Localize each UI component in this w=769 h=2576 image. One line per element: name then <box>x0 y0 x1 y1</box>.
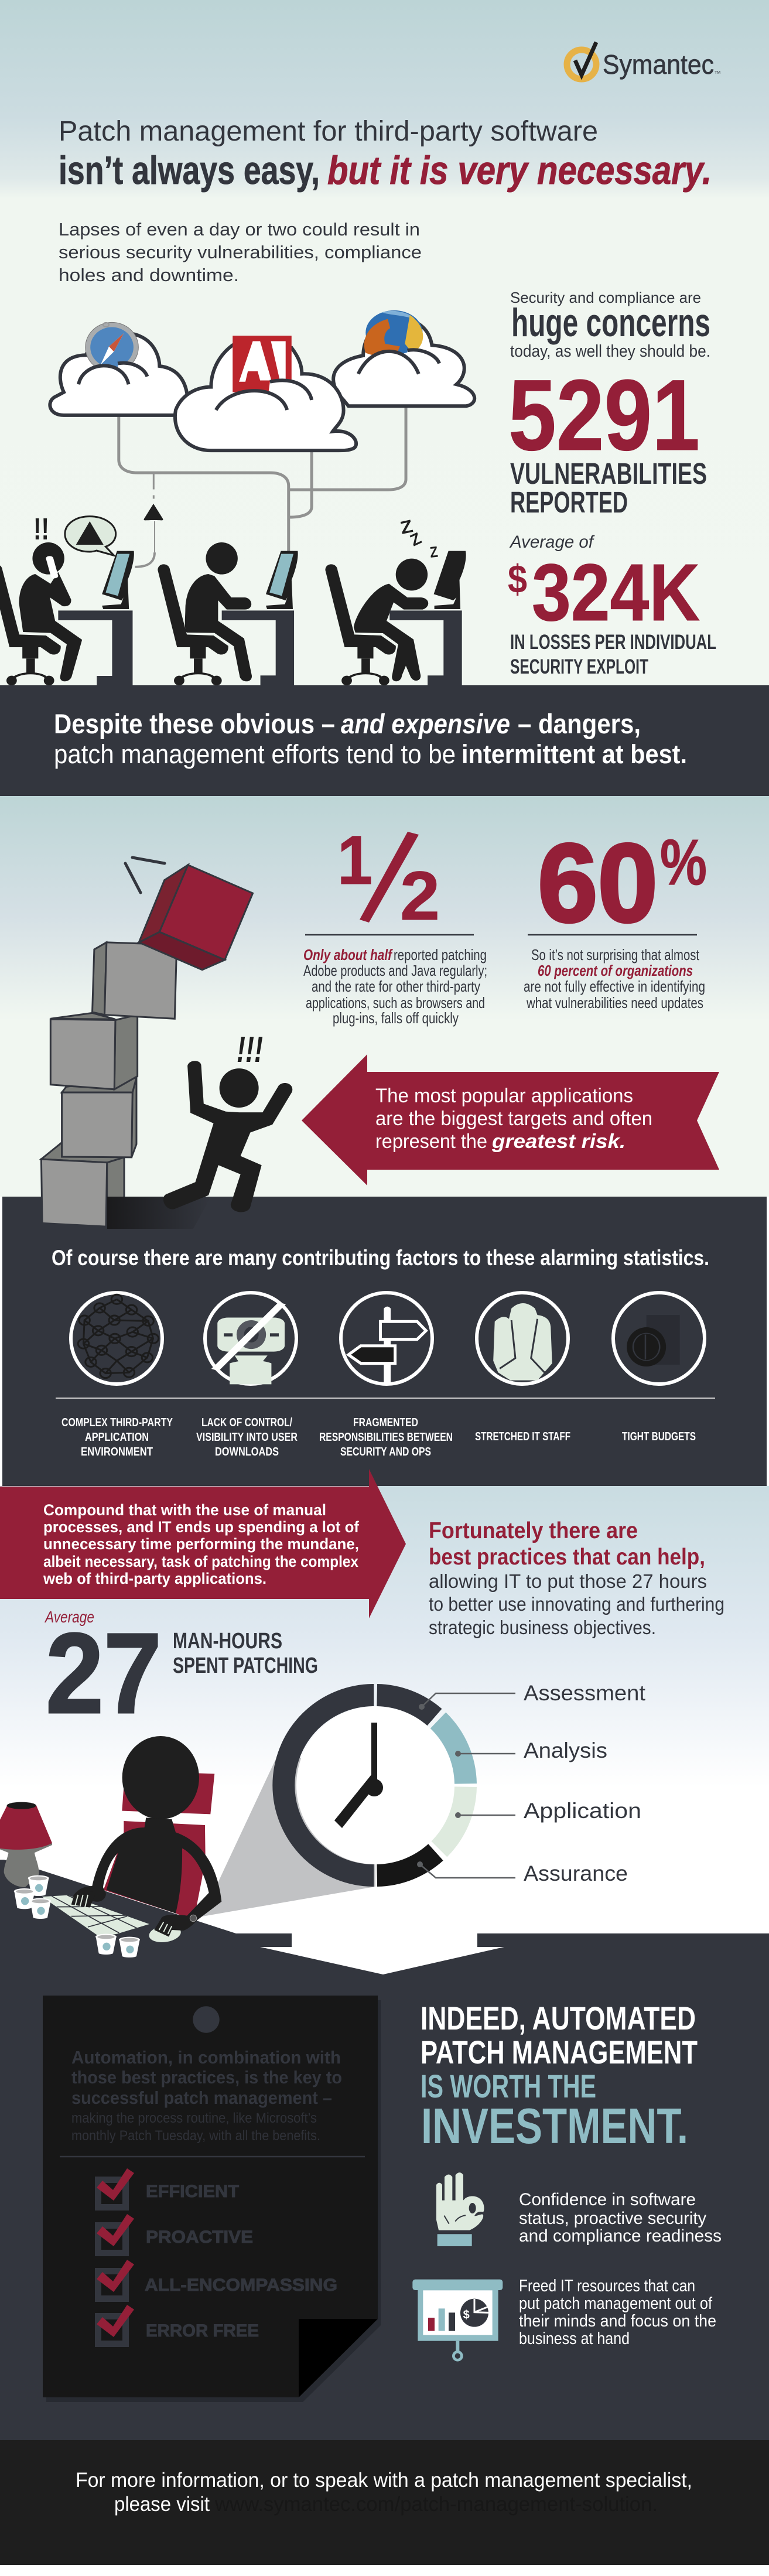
checklist: all-encompassing <box>97 2260 337 2298</box>
panel: best practices background <box>0 1486 769 1787</box>
text: 60 percent of organizations: So it’s not surprising that almost <box>531 946 700 964</box>
text: automation key: making the process routine, like Microsoft’s <box>71 2110 317 2126</box>
arrow: manual processes: web of third-party applications. <box>43 1570 266 1587</box>
stat: 5291 vulnerabilities <box>508 359 707 519</box>
icon: cloud right with Firefox <box>333 310 474 406</box>
stat: 27 man-hours <box>44 1608 318 1737</box>
stat: 60 percent <box>528 821 707 945</box>
illustration: working person <box>158 542 298 685</box>
stat: 324K losses: $ <box>508 557 527 602</box>
checklist: all-encompassing: ALL-ENCOMPASSING <box>145 2276 337 2295</box>
logo: Symantec: TM <box>715 71 720 75</box>
banner: despite these dangers: intermittent at best. <box>462 739 687 769</box>
text: automation key: those best practices, is the key to <box>71 2067 342 2088</box>
text: only about half: plug-ins, falls off quickly <box>333 1009 459 1027</box>
label: fragmented responsibilities: FRAGMENTED <box>353 1416 418 1429</box>
text: only about half: reported patching <box>394 946 487 964</box>
text: confidence: status, proactive security <box>519 2209 706 2228</box>
text: freed IT resources <box>519 2277 716 2348</box>
illustration: person at desk with lamp and cups <box>0 1736 221 1957</box>
heading: worth the investment: PATCH MANAGEMENT <box>421 2034 698 2071</box>
stat: 27 man-hours: MAN-HOURS <box>173 1629 282 1653</box>
stat: one half <box>305 822 474 935</box>
label: lack of control: VISIBILITY INTO USER <box>196 1431 298 1444</box>
label: lack of control <box>196 1416 298 1458</box>
label: complex third-party environment <box>61 1416 173 1458</box>
text: 60 percent of organizations: are not fully effective in identifying <box>524 978 705 995</box>
text: best practices: allowing IT to put those 27 hours <box>429 1570 707 1592</box>
text: best practices: Fortunately there are <box>429 1518 638 1543</box>
banner: despite these dangers: Despite these obvious – <box>54 708 335 739</box>
illustration: falling boxes <box>41 857 253 1226</box>
phase labels with leader lines: Assurance <box>524 1861 628 1885</box>
stat: 324K losses: SECURITY EXPLOIT <box>510 655 648 678</box>
label: lack of control: DOWNLOADS <box>215 1446 279 1458</box>
phase labels with leader lines <box>417 1681 646 1885</box>
icon: Firefox globe <box>364 310 423 357</box>
arrow: popular applications: are the biggest targets and often <box>375 1108 652 1130</box>
label: complex third-party environment: ENVIRONMENT <box>81 1446 153 1458</box>
text: automation key: Automation, in combination with <box>71 2047 341 2068</box>
text: best practices: best practices that can help, <box>429 1545 705 1570</box>
illustration: alarmed person: !!! <box>237 1030 263 1070</box>
stat: 60 percent: 60 <box>538 821 658 945</box>
stat: 27 man-hours: SPENT PATCHING <box>173 1653 318 1678</box>
text: only about half <box>303 946 487 1027</box>
checklist: error free: ERROR FREE <box>146 2321 259 2341</box>
arrow: manual processes: Compound that with the use of manual <box>43 1501 326 1519</box>
text: only about half: applications, such as browsers and <box>306 994 485 1012</box>
checklist: efficient: EFFICIENT <box>146 2182 239 2201</box>
label: tight budgets: TIGHT BUDGETS <box>622 1430 696 1443</box>
title: Patch management for third-party software <box>59 116 598 147</box>
intro text: Lapses of even a day or two could result in <box>59 219 420 240</box>
arrow: popular applications: represent the <box>375 1130 487 1153</box>
illustration: sleeping worker: Z <box>429 544 439 561</box>
arrow: popular applications <box>302 1054 719 1185</box>
footer <box>0 2440 769 2565</box>
icon: presentation board: $ <box>463 2309 470 2322</box>
panel: header background <box>0 0 769 685</box>
arrow: popular applications: greatest risk. <box>491 1130 626 1153</box>
banner: despite these dangers: patch management efforts tend to be <box>54 739 456 769</box>
text: best practices: strategic business objectives. <box>429 1617 656 1638</box>
text: huge concerns: Security and compliance are <box>510 289 701 306</box>
text: automation key: monthly Patch Tuesday, with all the benefits. <box>71 2128 320 2144</box>
phase labels with leader lines: Application <box>524 1799 641 1823</box>
text: 60 percent of organizations <box>524 946 705 1012</box>
footer: For more information, or to speak with a patch management specialist, <box>76 2469 692 2492</box>
text: huge concerns <box>510 289 710 361</box>
text: only about half: and the rate for other third-party <box>312 978 480 995</box>
stat: one half: 1 <box>337 822 372 899</box>
text: freed IT resources: their minds and focus on the <box>519 2312 716 2331</box>
label: fragmented responsibilities: SECURITY AND OPS <box>340 1446 431 1458</box>
logo: Symantec <box>567 42 720 80</box>
arrow: manual processes: unnecessary time performing the mundane, <box>43 1535 359 1553</box>
illustration: sleeping worker: Z <box>407 529 424 549</box>
illustration: alarmed person <box>107 1030 292 1229</box>
banner: despite these dangers: – dangers, <box>518 708 641 739</box>
text: confidence: Confidence in software <box>519 2190 696 2209</box>
icon: Safari compass <box>86 322 138 372</box>
heading: worth the investment: INVESTMENT. <box>421 2099 688 2154</box>
logo: Symantec: Symantec <box>603 49 714 80</box>
label: fragmented responsibilities <box>319 1416 453 1458</box>
label: stretched IT staff: STRETCHED IT STAFF <box>475 1430 570 1443</box>
icon: OK hand <box>436 2172 484 2246</box>
text: freed IT resources: Freed IT resources that can <box>519 2277 695 2295</box>
text: best practices: to better use innovating and furthering <box>429 1593 724 1615</box>
title <box>59 116 712 193</box>
illustration: stressed worker: !! <box>33 513 49 546</box>
icon: cloud centre with Adobe <box>175 336 356 450</box>
heading: worth the investment: INDEED, AUTOMATED <box>421 2000 696 2037</box>
title: isn’t always easy, <box>59 148 320 193</box>
text: confidence <box>519 2190 722 2246</box>
wires connecting clouds <box>119 402 406 567</box>
icon: cloud left with Safari <box>50 322 187 415</box>
title: but it is very necessary. <box>327 148 712 193</box>
icon: signpost <box>341 1293 432 1384</box>
label: complex third-party environment: APPLICATION <box>85 1431 149 1444</box>
text: freed IT resources: business at hand <box>519 2329 630 2348</box>
icon: presentation board <box>412 2280 503 2360</box>
heading: worth the investment: IS WORTH THE <box>421 2068 596 2104</box>
panel: paper checklist <box>43 1996 381 2402</box>
text: only about half: Adobe products and Java regularly; <box>303 962 487 979</box>
stat: 5291 vulnerabilities: 5291 <box>508 359 700 472</box>
text: automation key <box>71 2047 342 2144</box>
intro text <box>59 219 422 285</box>
stat: 324K losses: 324K <box>532 548 700 638</box>
text: best practices <box>429 1518 724 1638</box>
heading: worth the investment <box>421 2000 698 2154</box>
illustration: sleeping worker: Z <box>398 516 415 538</box>
text: 60 percent of organizations: what vulnerabilities need updates <box>526 994 703 1012</box>
panel: risk section background <box>0 796 769 1197</box>
illustration: stressed worker <box>0 513 134 685</box>
text: freed IT resources: put patch management out of <box>519 2294 713 2313</box>
banner: despite these dangers: and expensive <box>341 708 510 739</box>
arrow: popular applications: The most popular applications <box>375 1085 633 1107</box>
label: fragmented responsibilities: RESPONSIBILITIES BETWEEN <box>319 1431 453 1444</box>
checklist: proactive <box>97 2214 253 2253</box>
text: 60 percent of organizations: 60 percent of organizations <box>538 962 693 979</box>
checklist: efficient <box>97 2168 239 2207</box>
intro text: serious security vulnerabilities, compliance <box>59 242 422 262</box>
text: automation key: successful patch management – <box>71 2088 332 2108</box>
footer: please visit <box>114 2493 210 2516</box>
icon: Adobe <box>233 336 292 392</box>
arrow: manual processes <box>0 1469 406 1618</box>
stat: 324K losses: Average of <box>509 532 595 552</box>
clock beam <box>202 1750 375 1916</box>
checklist: error free <box>97 2305 259 2344</box>
panel: dark contributing factors <box>2 1197 767 1486</box>
phase labels with leader lines: Assessment <box>524 1681 646 1705</box>
arrow: manual processes: albeit necessary, task of patching the complex <box>43 1553 358 1570</box>
dark lower panel with arrow cut-out <box>0 1860 769 2440</box>
text: huge concerns: today, as well they should be. <box>510 342 710 361</box>
chart: clock of patch phases <box>283 1695 466 1875</box>
text: confidence: and compliance readiness <box>519 2226 722 2246</box>
stat: 60 percent: % <box>660 826 707 898</box>
stat: 27 man-hours: Average <box>44 1608 94 1626</box>
illustration: sleeping worker <box>325 516 466 685</box>
icon: cone on wire <box>144 504 163 520</box>
icon: blocked webcam <box>205 1293 296 1384</box>
stat: 324K losses <box>508 532 716 678</box>
phase labels with leader lines: Analysis <box>524 1738 607 1762</box>
text: only about half: Only about half <box>303 946 393 964</box>
arrow: manual processes: processes, and IT ends up spending a lot of <box>43 1518 360 1536</box>
footer: www.symantec.com/patch-management-solution. <box>214 2493 658 2516</box>
label: lack of control: LACK OF CONTROL/ <box>201 1416 292 1429</box>
icon: coin stack <box>613 1293 705 1384</box>
icon: raised hands <box>477 1293 568 1384</box>
banner: despite these dangers <box>0 685 769 796</box>
stat: 5291 vulnerabilities: REPORTED <box>510 486 628 519</box>
stat: one half: 2 <box>400 857 440 935</box>
intro text: holes and downtime. <box>59 265 239 285</box>
label: complex third-party environment: COMPLEX THIRD-PARTY <box>61 1416 173 1429</box>
stat: 27 man-hours: 27 <box>46 1610 162 1737</box>
checklist: proactive: PROACTIVE <box>146 2227 253 2247</box>
icon: complex network <box>71 1293 162 1384</box>
